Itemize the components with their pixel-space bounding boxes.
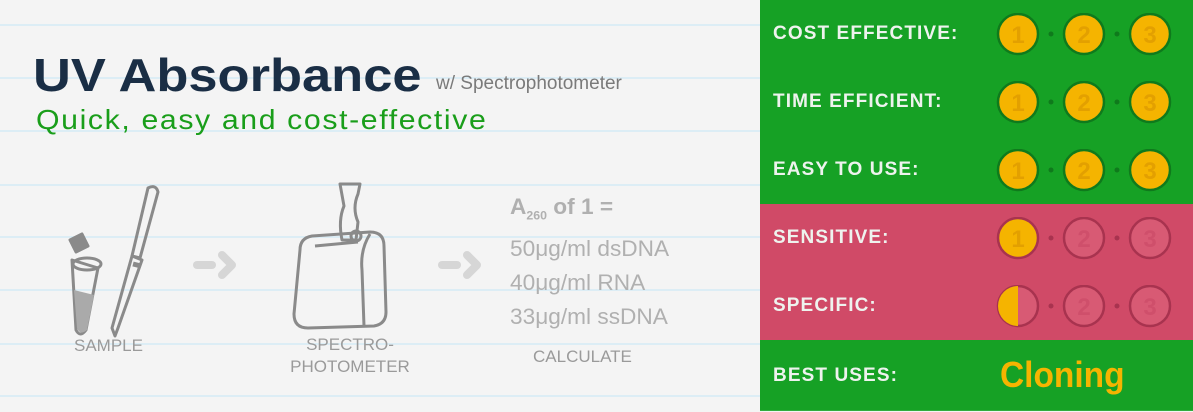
row: time efficient: 3 xyxy=(1143,90,1157,117)
subtitle: Quick, easy and cost-effective xyxy=(36,104,487,135)
row: easy to use: 1 xyxy=(1011,158,1025,185)
row: time efficient xyxy=(760,68,1193,137)
row: cost effective: COST EFFECTIVE: xyxy=(773,23,958,44)
row: specific: 2 xyxy=(1077,294,1091,321)
row: time efficient: 2 xyxy=(1077,90,1091,117)
row: specific: SPECIFIC: xyxy=(773,295,877,316)
row: easy to use: EASY TO USE: xyxy=(773,159,920,180)
row: best uses xyxy=(760,340,1193,411)
row: easy to use: 2 xyxy=(1077,158,1091,185)
labels under icons: SAMPLE xyxy=(74,336,143,355)
panel: ratings xyxy=(760,0,1193,411)
calculation text: A260 of 1 = xyxy=(510,194,613,222)
row: specific: 3 xyxy=(1143,294,1157,321)
text: PHOTOMETER xyxy=(290,357,410,376)
row: best uses: Cloning xyxy=(1000,354,1125,395)
row: sensitive xyxy=(760,204,1193,273)
row: cost effective: 2 xyxy=(1077,22,1091,49)
title: UV Absorbance xyxy=(33,49,422,101)
calculation text: 40μg/ml RNA xyxy=(510,270,645,295)
row: cost effective: 1 xyxy=(1011,22,1025,49)
row: sensitive: 3 xyxy=(1143,226,1157,253)
row: time efficient: 1 xyxy=(1011,90,1025,117)
row: sensitive: 2 xyxy=(1077,226,1091,253)
illustration: sample tube and pipette xyxy=(68,185,160,338)
row: cost effective xyxy=(760,0,1193,69)
illustration: spectrophotometer xyxy=(292,182,388,330)
text: CALCULATE xyxy=(533,347,632,366)
calculation text: 50μg/ml dsDNA xyxy=(510,236,669,261)
row: cost effective: 3 xyxy=(1143,22,1157,49)
text: SPECTRO- xyxy=(306,335,394,354)
row: easy to use xyxy=(760,136,1193,205)
row: easy to use: 3 xyxy=(1143,158,1157,185)
row: best uses: BEST USES: xyxy=(773,365,898,386)
row: sensitive: SENSITIVE: xyxy=(773,227,890,248)
arrow 1 xyxy=(193,251,236,279)
row: specific xyxy=(760,272,1193,341)
calculation text: 33μg/ml ssDNA xyxy=(510,304,668,329)
row: sensitive: 1 xyxy=(1011,226,1025,253)
arrow 2 xyxy=(438,251,481,279)
title suffix: w/ Spectrophotometer xyxy=(436,73,622,94)
row: time efficient: TIME EFFICIENT: xyxy=(773,91,943,112)
calculation text xyxy=(510,194,669,329)
